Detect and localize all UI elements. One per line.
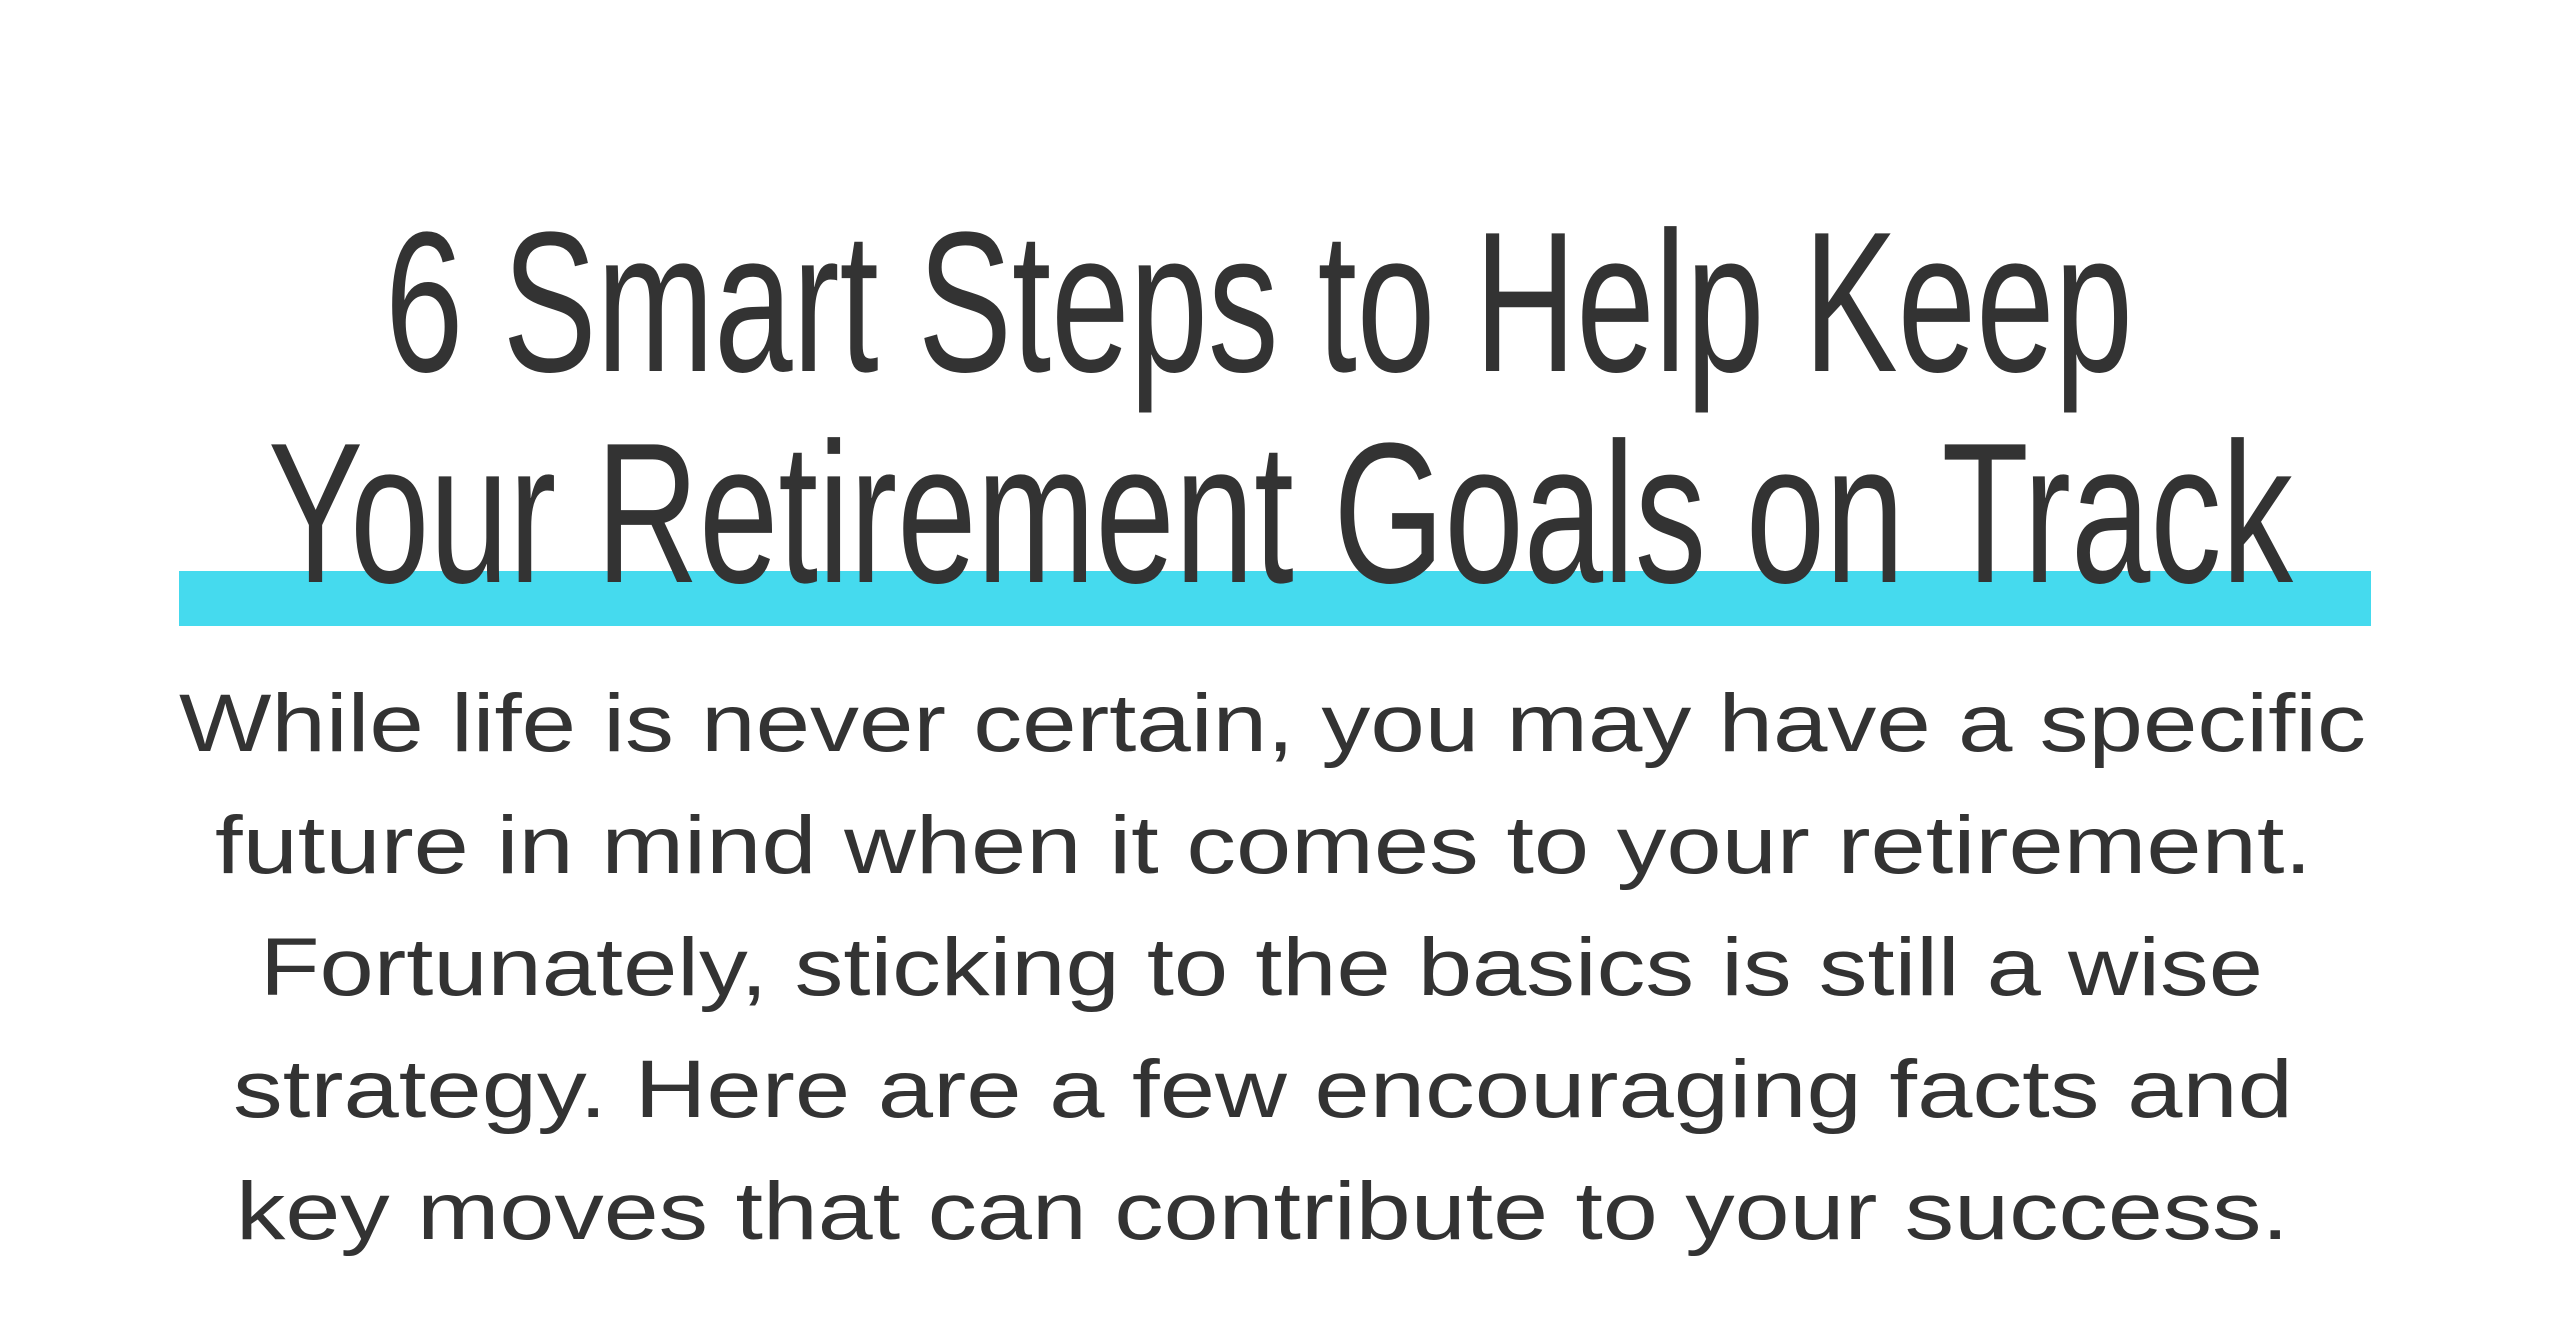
title	[268, 191, 2294, 625]
highlight bar under title	[179, 571, 2371, 626]
intro paragraph: key moves that can contribute to your success.	[236, 1166, 2289, 1257]
intro paragraph: Fortunately, sticking to the basics is still a wise	[260, 922, 2263, 1013]
intro paragraph: While life is never certain, you may have a specific	[179, 678, 2366, 769]
intro paragraph: strategy. Here are a few encouraging facts and	[233, 1044, 2293, 1135]
intro paragraph: future in mind when it comes to your retirement.	[215, 800, 2312, 891]
intro paragraph	[179, 678, 2366, 1257]
